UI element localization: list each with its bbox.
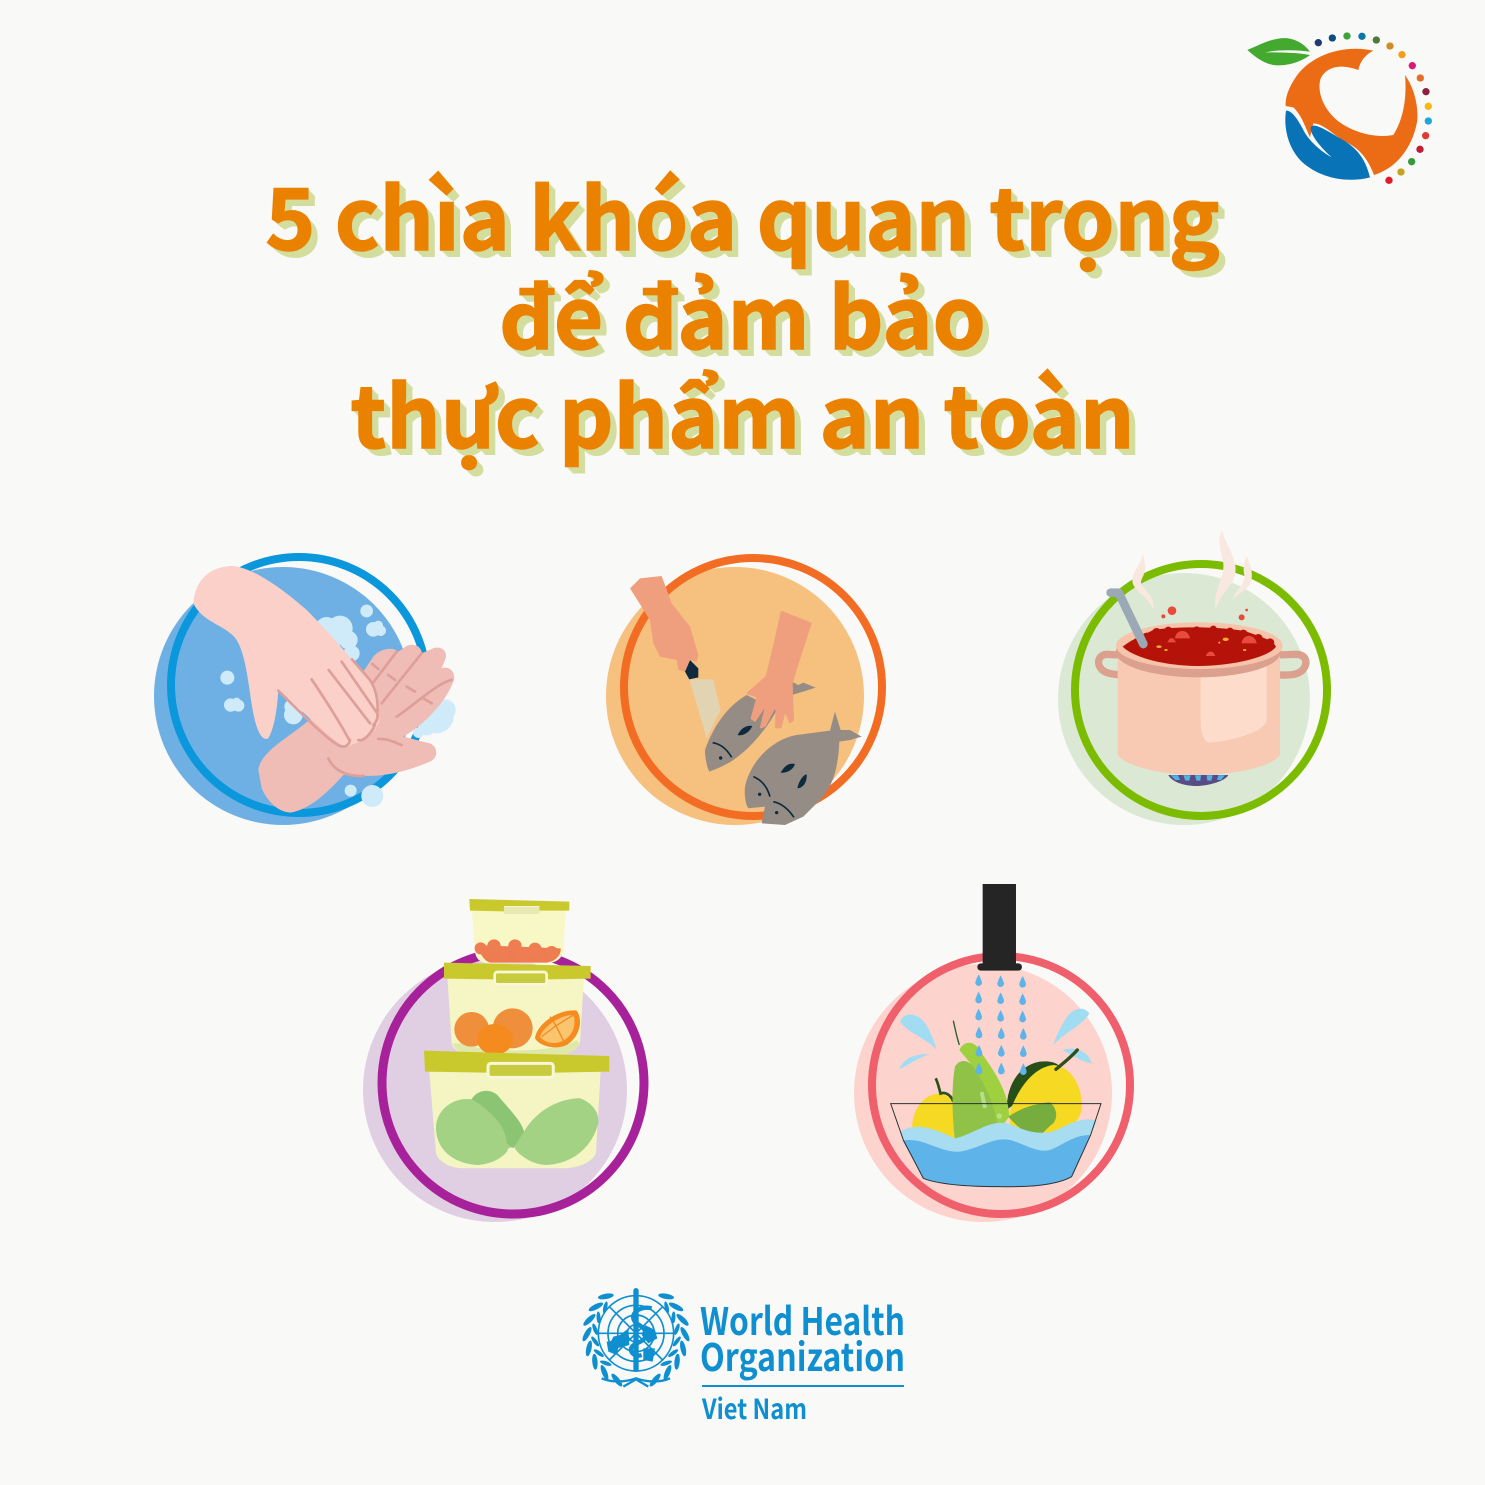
title xyxy=(265,152,1226,476)
title: 5 chìa khóa quan trọng xyxy=(265,152,1220,275)
logo: fruit, heart and hand xyxy=(1247,32,1432,184)
WHO wordmark: Organization xyxy=(700,1327,905,1382)
icon: tap, water and fruit bowl xyxy=(891,884,1101,1187)
WHO wordmark: World Health xyxy=(700,1291,905,1346)
title: thực phẩm an toàn xyxy=(351,350,1134,473)
panel: wash hands xyxy=(154,557,456,825)
WHO wordmark xyxy=(700,1291,905,1428)
icon: washing hands xyxy=(193,566,456,813)
icon: knife, hands and fish xyxy=(630,576,862,825)
icon: green leaf xyxy=(1247,38,1310,65)
icon: blue hand xyxy=(1285,111,1370,180)
panel: safe water and produce xyxy=(854,884,1130,1222)
panel: separate raw and cooked xyxy=(606,558,882,825)
icon: stacked food containers xyxy=(424,899,609,1168)
WHO wordmark: Viet Nam xyxy=(701,1388,807,1428)
panel: cook thoroughly xyxy=(1058,530,1327,825)
icon: orange fruit with heart xyxy=(1286,49,1417,175)
logo: WHO emblem xyxy=(581,1291,691,1388)
title: để đảm bảo xyxy=(499,251,986,374)
panel: safe storage xyxy=(363,899,644,1222)
icon: coloured SDG dots xyxy=(1315,32,1432,184)
icon: cooking pot xyxy=(1099,530,1306,786)
